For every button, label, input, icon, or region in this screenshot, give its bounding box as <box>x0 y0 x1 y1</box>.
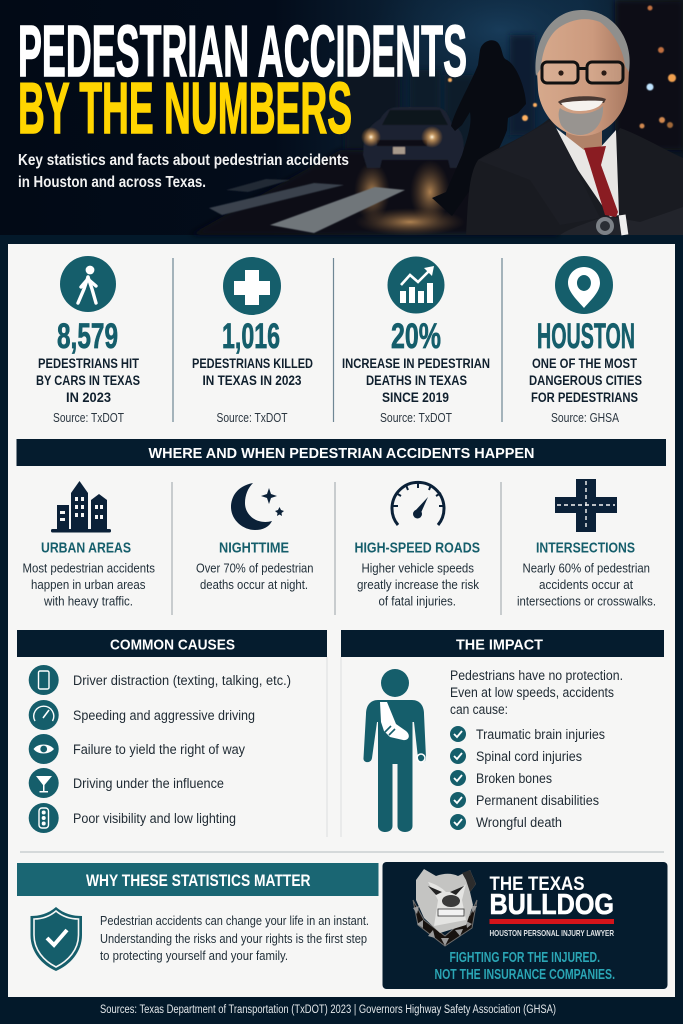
panel: why these statistics matter: WHY THESE STATISTICS MATTER <box>86 872 311 890</box>
panel: where and when <box>22 479 656 615</box>
stat: Houston: Source: GHSA <box>551 411 620 425</box>
cause: speeding: Speeding and aggressive driving <box>73 708 255 723</box>
subtitle: in Houston and across Texas. <box>18 174 206 191</box>
stat: pedestrians hit: Source: TxDOT <box>53 411 124 425</box>
nighttime: deaths occur at night. <box>200 577 308 592</box>
cause: driver distraction: Driver distraction (texting, talking, etc.) <box>73 673 291 688</box>
car <box>363 107 464 168</box>
checklist: Permanent disabilities <box>476 793 599 808</box>
footer sources: Sources: Texas Department of Transportation (TxDOT) 2023 | Governors Highway Safety Association (GHSA) <box>100 1004 556 1016</box>
city lights <box>408 6 676 128</box>
stat: increase in deaths: 20% <box>391 317 441 356</box>
stat: pedestrians hit <box>36 256 140 425</box>
intersections: accidents occur at <box>539 577 633 592</box>
nighttime: NIGHTTIME <box>219 540 289 556</box>
intersections: Nearly 60% of pedestrian <box>522 560 650 576</box>
logo tagline <box>434 950 615 983</box>
stat: increase in deaths: SINCE 2019 <box>382 390 449 405</box>
panel: why these statistics matter: Pedestrian accidents can change your life in an instant. <box>100 913 369 928</box>
icon: shield <box>30 907 82 971</box>
high-speed roads: of fatal injuries. <box>378 594 456 608</box>
intersections: intersections or crosswalks. <box>517 594 656 608</box>
title <box>18 12 467 149</box>
stat: Houston: ONE OF THE MOST <box>532 356 638 371</box>
logo tagline: NOT THE INSURANCE COMPANIES. <box>434 967 615 983</box>
stat: increase in deaths: INCREASE IN PEDESTRIAN <box>342 356 490 371</box>
stat: pedestrians killed: Source: TxDOT <box>216 411 288 425</box>
subtitle <box>18 152 349 191</box>
logo wordmark <box>490 874 614 938</box>
logo wordmark: HOUSTON PERSONAL INJURY LAWYER <box>490 928 614 938</box>
urban areas: with heavy traffic. <box>43 594 133 608</box>
stat: pedestrians hit: IN 2023 <box>66 390 111 405</box>
attorney photo <box>466 10 683 235</box>
logo wordmark: THE TEXAS <box>490 874 584 895</box>
intro text: Even at low speeds, accidents <box>450 685 614 700</box>
logo wordmark: BULLDOG <box>490 889 614 921</box>
stat: pedestrians killed <box>192 257 313 425</box>
nighttime <box>196 483 314 592</box>
cause: poor visibility <box>29 803 236 833</box>
cause: failure to yield <box>29 734 245 764</box>
stat: increase in deaths <box>342 256 490 425</box>
stat: Houston <box>529 256 642 425</box>
stat: pedestrians hit: 8,579 <box>57 317 118 356</box>
header photo: night street scene <box>0 0 683 236</box>
crosswalk stripes <box>209 179 405 233</box>
panel: key statistics <box>36 256 642 425</box>
high-speed roads: Higher vehicle speeds <box>362 560 474 576</box>
intro text: can cause: <box>450 702 508 717</box>
checklist: Wrongful death <box>476 815 562 830</box>
urban areas: Most pedestrian accidents <box>22 560 155 576</box>
stat: increase in deaths: DEATHS IN TEXAS <box>366 373 467 388</box>
urban areas: URBAN AREAS <box>41 540 131 556</box>
checklist: Broken bones <box>476 771 552 786</box>
stat: Houston: DANGEROUS CITIES <box>529 373 642 388</box>
checklist: Spinal cord injuries <box>476 749 582 764</box>
checklist: Traumatic brain injuries <box>476 727 605 742</box>
icon: bulldog <box>413 869 477 946</box>
stat: pedestrians killed: PEDESTRIANS KILLED <box>192 356 313 371</box>
intersections <box>517 479 656 608</box>
urban areas <box>22 481 155 608</box>
high-speed roads: HIGH-SPEED ROADS <box>354 540 480 556</box>
cause: driving under the influence <box>29 768 224 798</box>
cause: poor visibility: Poor visibility and low lighting <box>73 811 236 826</box>
urban areas: happen in urban areas <box>31 577 146 592</box>
panel: why these statistics matter: Understanding the risks and your rights is the first step <box>100 931 367 946</box>
stat: Houston: FOR PEDESTRIANS <box>531 390 638 405</box>
road <box>190 150 560 235</box>
nighttime: Over 70% of pedestrian <box>196 560 314 576</box>
checklist <box>450 726 605 830</box>
intro text: Pedestrians have no protection. <box>450 668 623 683</box>
title: BY THE NUMBERS <box>18 69 352 149</box>
icon: injured person <box>363 669 426 832</box>
panel: common causes: COMMON CAUSES <box>110 636 235 654</box>
panel: why these statistics matter: to protecting yourself and your family. <box>100 948 288 963</box>
subtitle: Key statistics and facts about pedestrian accidents <box>18 152 349 169</box>
stat: pedestrians killed: 1,016 <box>222 317 280 356</box>
panel: The Texas Bulldog logo <box>382 862 668 989</box>
cause: driving under the influence: Driving under the influence <box>73 776 224 791</box>
stat: increase in deaths: Source: TxDOT <box>380 411 452 425</box>
section heading: where and when <box>16 439 666 466</box>
logo tagline: FIGHTING FOR THE INJURED. <box>450 950 600 966</box>
intro text <box>450 668 623 717</box>
panel: why these statistics matter <box>17 863 378 971</box>
panel: the impact: THE IMPACT <box>456 636 543 654</box>
cause: driver distraction <box>29 665 291 695</box>
stat: pedestrians hit: PEDESTRIANS HIT <box>38 356 140 371</box>
cause: failure to yield: Failure to yield the right of way <box>73 742 245 757</box>
main content panel <box>8 244 675 997</box>
pedestrian silhouette <box>432 40 526 216</box>
high-speed roads <box>354 482 480 608</box>
stat: pedestrians killed: IN TEXAS IN 2023 <box>202 373 302 388</box>
cause: speeding <box>29 700 255 730</box>
high-speed roads: greatly increase the risk <box>357 577 479 592</box>
intersections: INTERSECTIONS <box>536 540 635 556</box>
section heading: where and when: WHERE AND WHEN PEDESTRIAN ACCIDENTS HAPPEN <box>148 445 534 462</box>
panel: common causes <box>17 630 327 837</box>
stat: pedestrians hit: BY CARS IN TEXAS <box>36 373 140 388</box>
panel: the impact <box>341 630 664 837</box>
